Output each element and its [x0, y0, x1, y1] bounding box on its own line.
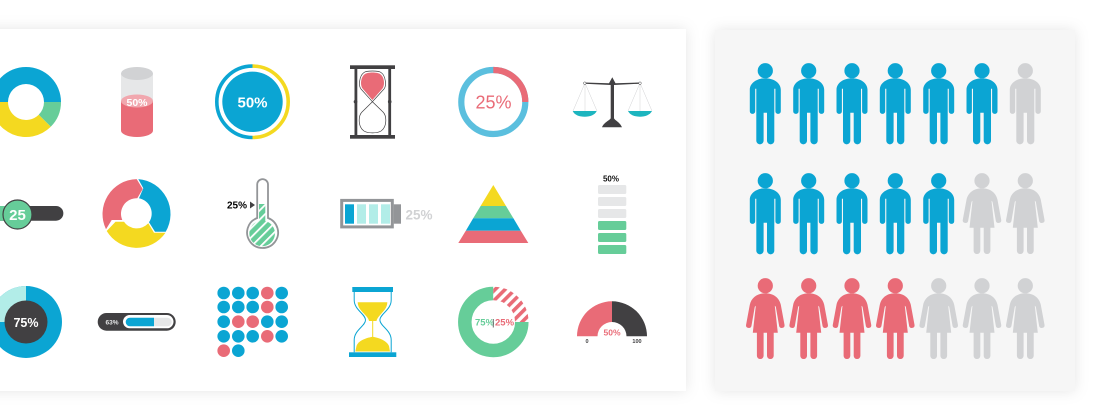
- battery 25%: [342, 200, 433, 227]
- semicircle gauge 50%: 0: [585, 339, 589, 345]
- slider: value 25: [0, 200, 63, 229]
- pictogram row 1: six of seven men: [750, 63, 1041, 144]
- semicircle gauge 50%: 50%: [603, 328, 621, 338]
- icon: hourglass with red sand: [350, 65, 395, 139]
- circular gauge 50%: [217, 66, 288, 138]
- donut chart 75%: 75%: [13, 316, 39, 330]
- circular gauge 50%: 50%: [237, 94, 268, 111]
- cylinder gauge 50%: [121, 67, 153, 137]
- donut chart 75%: [0, 286, 62, 358]
- semicircle gauge 50%: [577, 301, 647, 345]
- cycle donut: three arrows: [103, 179, 171, 248]
- ring chart 75% / 25% with hatching: 75%: [475, 318, 495, 328]
- panel: people pictogram: [715, 30, 1075, 391]
- progress bar 63%: 63%: [105, 320, 119, 327]
- stacked level bars 50%: 50%: [603, 174, 619, 184]
- stacked level bars 50%: [598, 174, 626, 254]
- ring chart 25%: 25%: [475, 92, 512, 112]
- icon: balance scales: [573, 77, 652, 127]
- ring chart 75% / 25% with hatching: [465, 294, 522, 350]
- progress bar 63%: [98, 313, 176, 331]
- cylinder gauge 50%: 50%: [126, 97, 148, 109]
- ring chart 25%: [461, 70, 525, 134]
- battery 25%: 25%: [405, 208, 433, 222]
- pictogram row 2: five men and two women: [750, 173, 1045, 254]
- pyramid chart: [458, 185, 528, 243]
- thermometer 25%: 25%: [227, 200, 247, 212]
- ring chart 75% / 25% with hatching: |: [492, 318, 494, 328]
- slider: value 25: 25: [9, 207, 26, 224]
- dot matrix chart: [217, 287, 288, 357]
- thermometer 25%: [227, 179, 278, 248]
- icon: hourglass with yellow sand: [349, 287, 396, 357]
- ring chart 75% / 25% with hatching: 25%: [495, 318, 515, 328]
- semicircle gauge 50%: 100: [632, 339, 642, 345]
- panel: icons: [0, 29, 686, 391]
- donut chart: three segments: [0, 67, 61, 137]
- pictogram row 3: four of seven women: [746, 278, 1045, 359]
